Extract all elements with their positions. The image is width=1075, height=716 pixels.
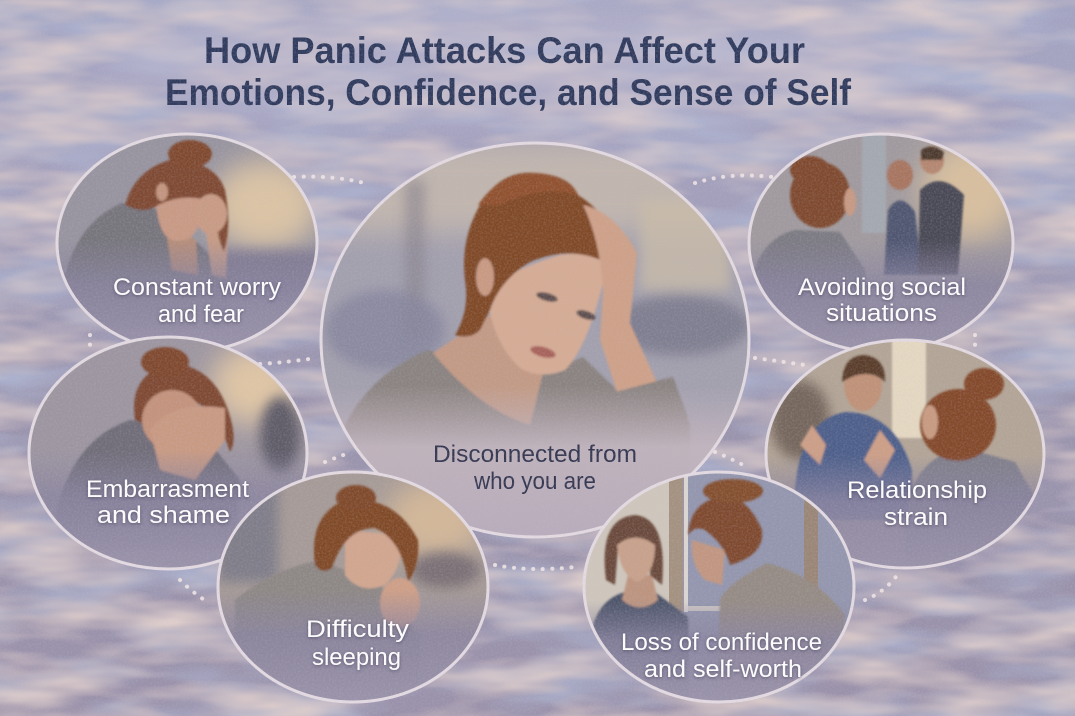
label: sleeping: [312, 644, 401, 671]
label: and self-worth: [644, 656, 802, 683]
panel: right, relationship strain: [765, 338, 1045, 570]
woman: [66, 138, 230, 281]
two people: [884, 146, 964, 275]
label: and fear: [158, 301, 244, 328]
dotted connectors: [90, 175, 975, 601]
label: [86, 476, 249, 529]
woman: [235, 484, 420, 627]
label: Avoiding social: [798, 274, 966, 301]
man: [795, 355, 912, 520]
title: Emotions, Confidence, and Sense of Self: [165, 72, 852, 113]
label: who you are: [473, 468, 596, 495]
panel: top left, constant worry and fear: [50, 130, 325, 355]
woman: [345, 171, 690, 439]
label: Relationship: [847, 477, 987, 504]
label: Embarrasment: [86, 476, 249, 503]
label: Difficulty: [306, 616, 409, 643]
label: and shame: [97, 502, 230, 529]
woman: [62, 346, 240, 496]
panel: left, embarrassment and shame: [28, 335, 308, 570]
label: Disconnected from: [433, 441, 637, 468]
woman: [686, 478, 846, 639]
label: [433, 441, 637, 495]
label: Constant worry: [113, 274, 281, 301]
label: situations: [826, 300, 937, 327]
reflection: [592, 514, 689, 656]
label: strain: [884, 504, 948, 531]
label: [847, 477, 987, 531]
panel: top right, avoiding social situations: [748, 133, 1020, 355]
title: How Panic Attacks Can Affect Your: [204, 30, 805, 71]
label: [306, 616, 409, 671]
label: Loss of confidence: [621, 629, 822, 656]
woman: [913, 366, 1033, 501]
panel: bottom right, loss of confidence and self-worth: [583, 472, 855, 702]
panel: bottom left, difficulty sleeping: [218, 472, 490, 702]
label: [798, 274, 966, 327]
label: [621, 629, 822, 683]
title: [165, 30, 852, 113]
woman seen from behind: [754, 154, 865, 282]
panel: centre, disconnected from who you are: [320, 142, 750, 540]
label: [113, 274, 281, 328]
